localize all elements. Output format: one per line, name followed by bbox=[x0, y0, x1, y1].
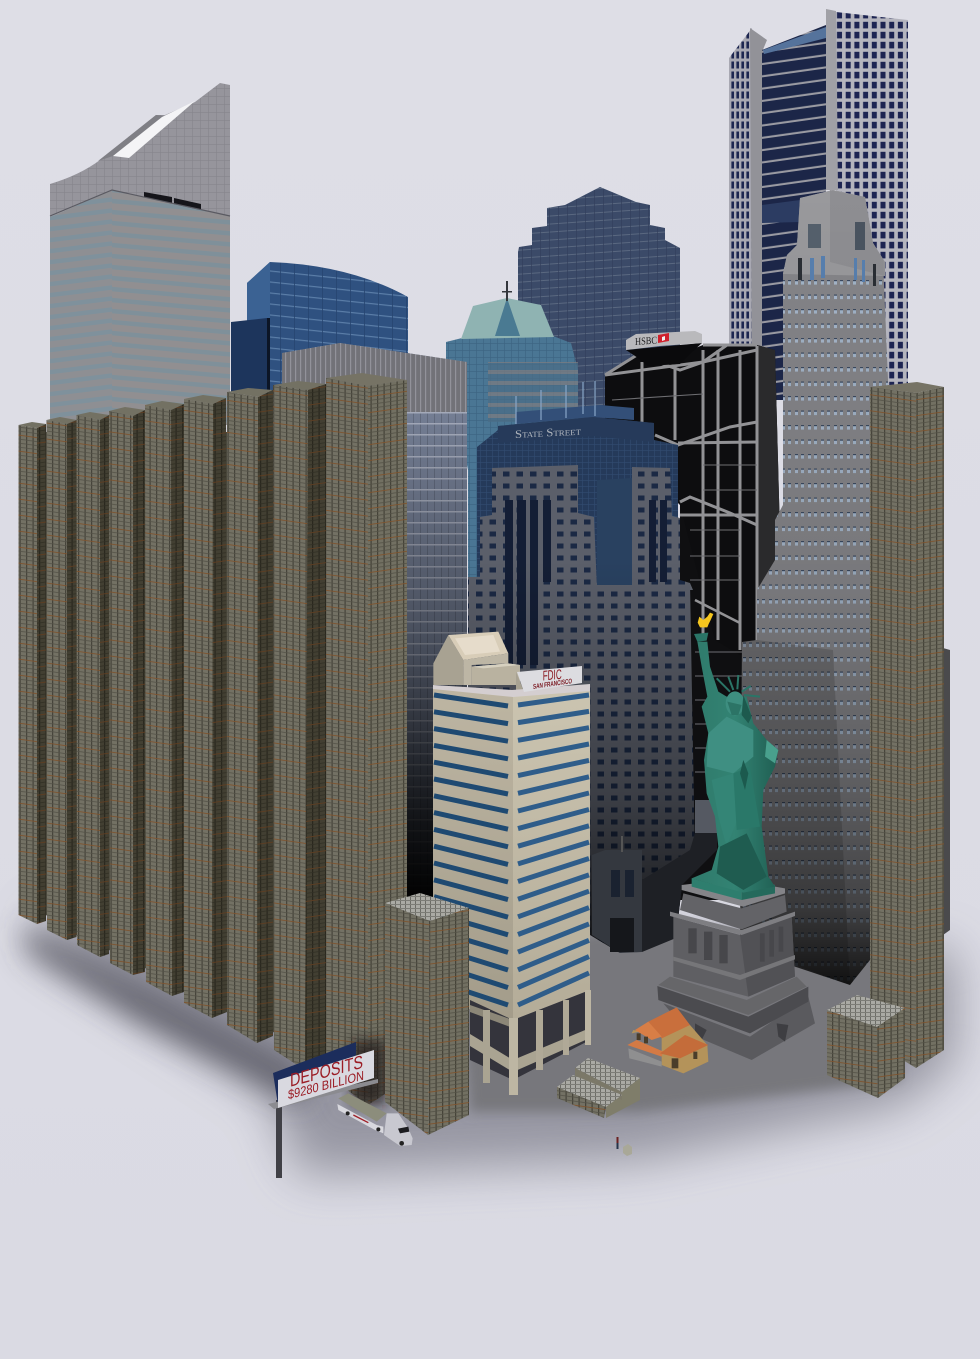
building: grey art-deco tower bbox=[740, 190, 888, 985]
HSBC sign: HSBC bbox=[635, 335, 657, 348]
dark wing behind statue bbox=[642, 800, 717, 952]
building: far-right sliver bbox=[943, 648, 950, 935]
billboard bbox=[268, 1042, 378, 1178]
ground shadow bbox=[25, 915, 955, 1175]
building: HSBC tower bbox=[605, 331, 783, 900]
building: far-right navy tower bbox=[729, 9, 908, 400]
HSBC sign bbox=[626, 331, 702, 350]
window strips left face bbox=[434, 695, 508, 1005]
column 5 bbox=[145, 401, 184, 996]
column 4 bbox=[109, 407, 145, 975]
column 2 bbox=[46, 417, 76, 940]
wall backing bbox=[40, 432, 400, 1055]
FDIC sign text: SAN FRANCISCO bbox=[533, 678, 572, 691]
statue pedestal bbox=[657, 883, 815, 1060]
window strips right face bbox=[518, 695, 589, 1005]
person and money pack bbox=[616, 1137, 632, 1156]
column 1 bbox=[18, 422, 46, 924]
building: Citi-style slanted tower bbox=[50, 83, 230, 425]
right tall money column bbox=[870, 382, 944, 1068]
pilotis bbox=[470, 990, 591, 1095]
building: FDIC San Francisco bbox=[433, 632, 591, 1095]
money column wall bbox=[18, 373, 407, 1105]
column 8 bbox=[273, 381, 326, 1070]
building: teal pyramid tower bbox=[446, 281, 590, 600]
FDIC sign text: FDIC bbox=[543, 666, 562, 683]
house bbox=[627, 1007, 708, 1073]
billboard text: DEPOSITS bbox=[290, 1051, 363, 1091]
State Street sign: State Street bbox=[515, 426, 581, 441]
truck bbox=[337, 1093, 413, 1146]
money cube bbox=[827, 995, 905, 1098]
Statue of Liberty bbox=[692, 613, 778, 900]
column 6 bbox=[184, 395, 227, 1018]
column 3 bbox=[76, 412, 109, 957]
building: dark blue stepped tower bbox=[518, 187, 680, 420]
lower annex block bbox=[592, 836, 642, 953]
building: glass mid-rise bbox=[282, 343, 467, 900]
small money column bbox=[385, 893, 469, 1135]
billboard text bbox=[288, 1051, 364, 1102]
money pallets bbox=[557, 1058, 640, 1118]
column 7 bbox=[227, 388, 273, 1043]
building: State Street tower bbox=[468, 381, 717, 953]
billboard text: $9280 BILLION bbox=[288, 1068, 364, 1102]
building: blue curved tower bbox=[231, 262, 408, 395]
column 9 bbox=[326, 373, 407, 1105]
torch bbox=[694, 613, 713, 642]
FDIC sign text bbox=[533, 666, 572, 691]
